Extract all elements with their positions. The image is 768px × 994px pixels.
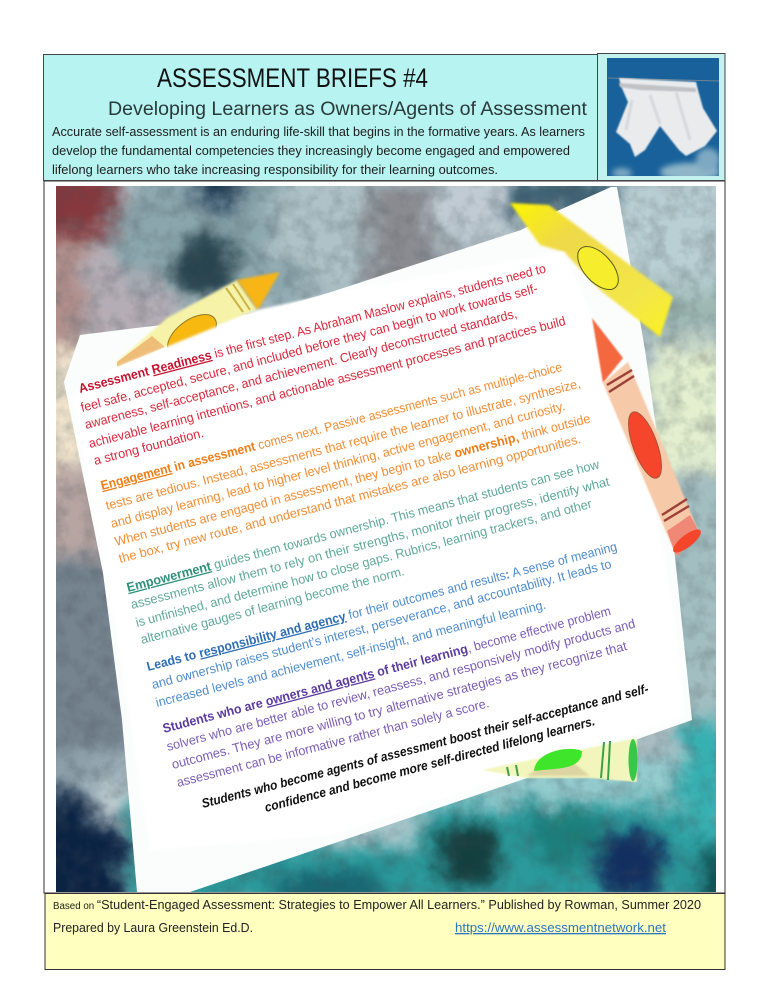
closing statement: Students who become agents of assessment boost their self-acceptance and self- [200,681,650,811]
paragraph: empowerment: Empowerment guides them towards ownership. This means that students can see how [125,456,601,595]
paragraph: assessment readiness [77,261,567,468]
paragraph: assessment readiness: achievable learning intentions, and actionable assessment processes and practices build [87,313,567,451]
panel: header photo of laundry on a line [598,54,725,181]
panel: header [44,54,598,180]
intro text: develop the fundamental competencies they increasingly become engaged and empowered [52,143,570,158]
panel: footer [45,894,725,970]
icon: green crayon [482,738,638,782]
paragraph: responsibility and agency: Leads to responsibility and agency for their outcomes and results: A sense of meaning [145,539,619,674]
paragraph: engagement: and display learning, lead to higher level thinking, active engagement, and curiosity. [109,398,567,531]
crayon paper inner text box [72,252,685,850]
intro text [52,124,585,177]
paragraph: engagement: the box, try new route, and understand that mistakes are also learning opportunities. [117,431,582,566]
paragraph: owners and agents: solvers who are better able to review, reassess, and responsively modify products and [165,616,637,754]
paragraph: empowerment: is unfinished, and determine how to close gaps. Rubrics, learning trackers, and other [134,496,594,630]
icon: red crayon [592,318,704,556]
icon: orange crayon [117,272,280,367]
paragraph: assessment readiness: awareness, self-acceptance, and achievement. Clearly deconstructed standards, [83,306,519,432]
paragraph: responsibility and agency: and ownership raises student’s interest, perseverance, and accountability. It leads to [150,556,613,692]
paragraph: empowerment: alternative gauges of learning become the norm. [139,563,406,647]
intro text: Accurate self-assessment is an enduring life-skill that begins in the formative years. As learners [52,124,585,139]
title: ASSESSMENT BRIEFS #4 [157,63,428,93]
paragraph: owners and agents: Students who are owners and agents of their learning, become effective problem [161,603,612,736]
page frame [44,181,725,893]
paragraph: assessment readiness: a strong foundation. [92,425,205,468]
paragraph: assessment readiness: feel safe, accepted, secure, and included before they can begin to work towards self- [79,281,539,415]
author credit: Prepared by Laura Greenstein Ed.D. [53,920,253,935]
paragraph: owners and agents: outcomes. They are more willing to try alternative strategies as they recognize that [170,638,629,772]
intro text: lifelong learners who take increasing responsibility for their learning outcomes. [52,162,498,177]
paragraph: engagement: Engagement in assessment comes next. Passive assessments such as multiple-choice [99,359,564,493]
closing statement: confidence and become more self-directed lifelong learners. [263,713,596,815]
paragraph: owners and agents: assessment can be informative rather than solely a score. [175,695,491,790]
website link: https://www.assessmentnetwork.net [455,920,666,935]
paragraph: engagement: When students are engaged in assessment, they begin to take ownership, think outside [113,411,592,549]
source citation: Based on “Student-Engaged Assessment: Strategies to Empower All Learners.” Published by Rowman, Summer 2020 [53,897,701,912]
icon: yellow crayon [510,203,673,337]
paragraph: engagement [99,359,592,566]
paragraph: assessment readiness: Assessment Readiness is the first step. As Abraham Maslow explains, students need to [77,261,547,396]
paragraph: engagement: tests are tedious. Instead, assessments that require the learner to illustrate, synthesize, [104,376,582,513]
paragraph: empowerment: assessments allow them to rely on their strengths, monitor their progress, identify what [129,474,611,612]
crayon paper sheet [64,187,692,892]
paragraph: responsibility and agency: increased levels and achievement, self-insight, and meaningful learning. [154,597,547,710]
watercolor background image [56,186,716,892]
subtitle: Developing Learners as Owners/Agents of Assessment [108,99,588,120]
